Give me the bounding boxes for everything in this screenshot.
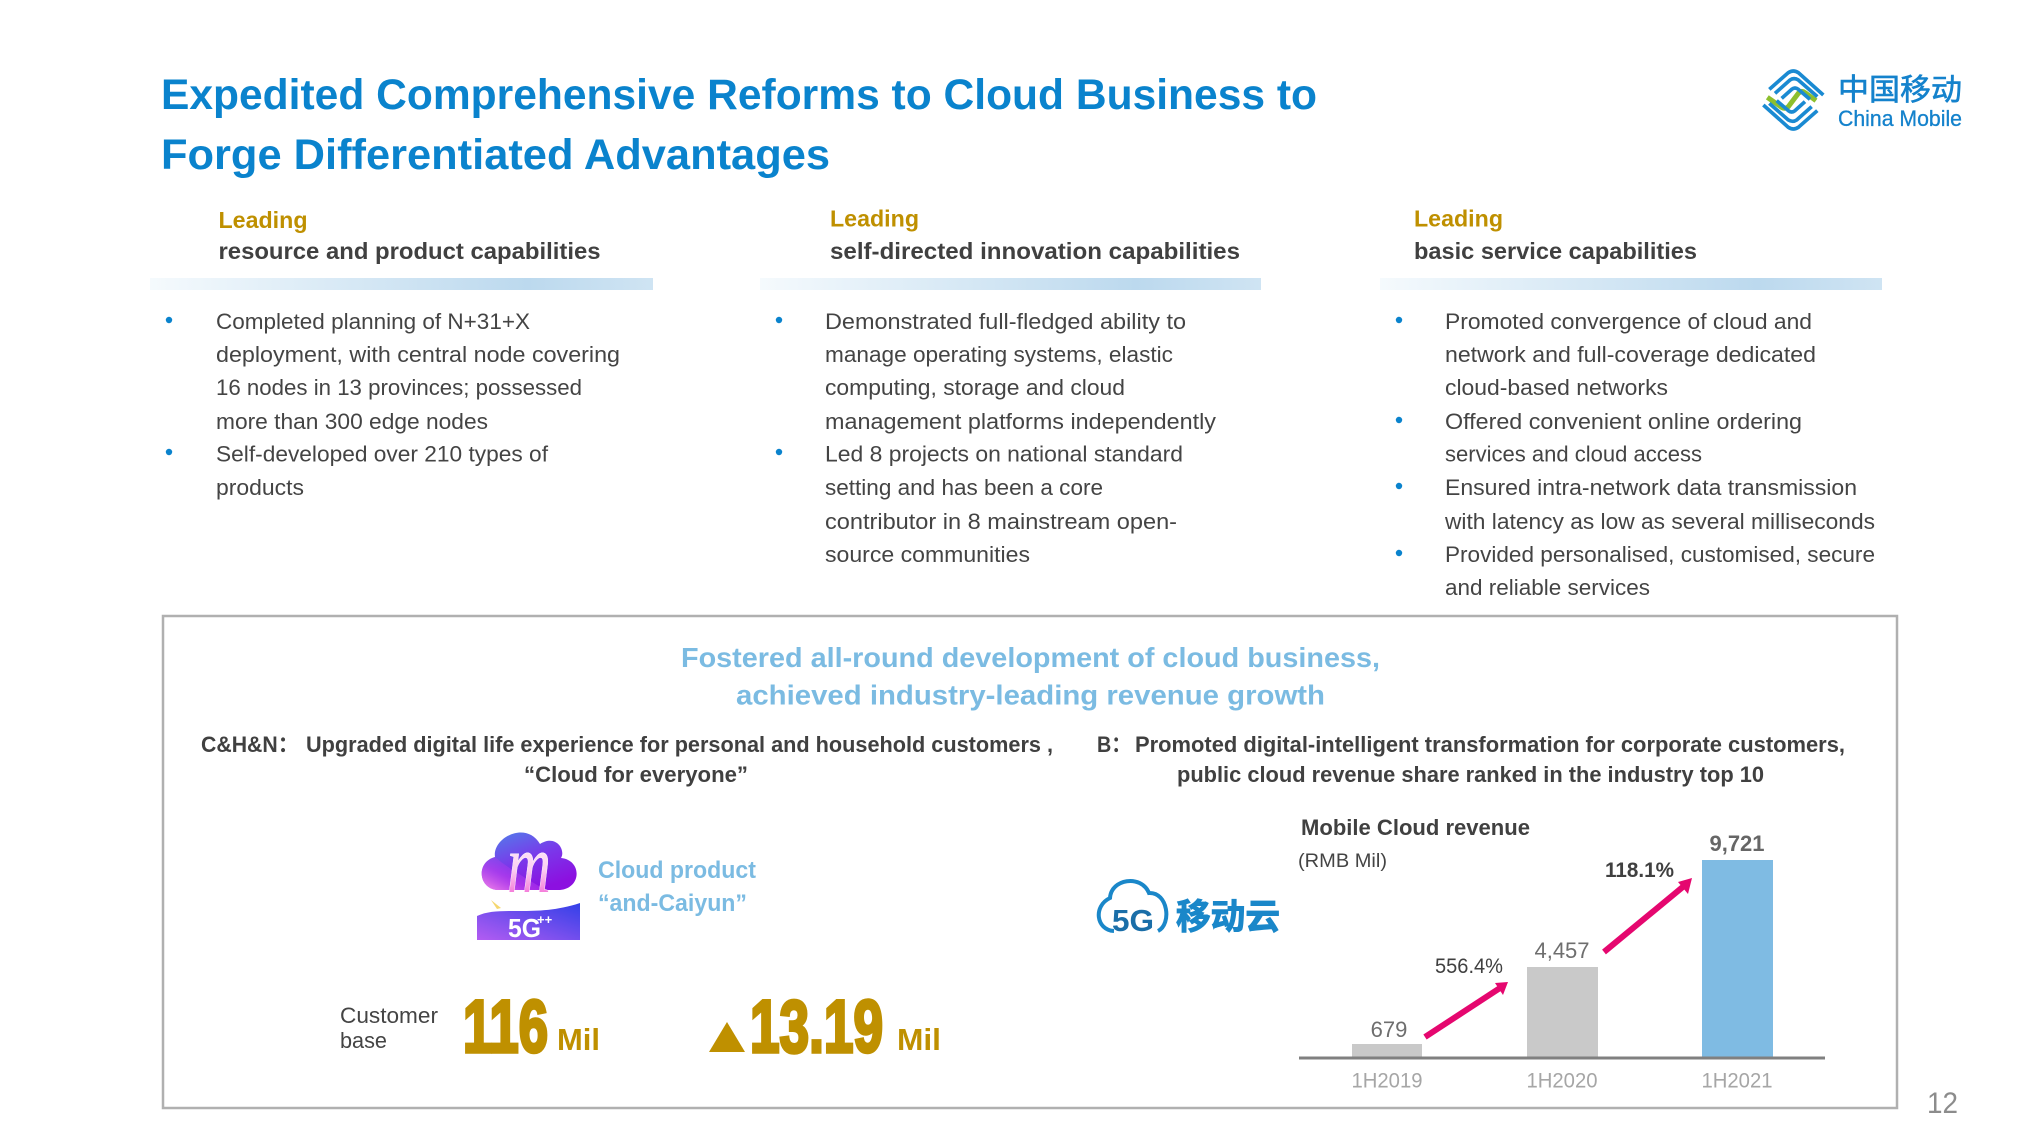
- subheading: C&H&N: C&H&N：: [201, 732, 299, 757]
- bar: 1H2020: 1H2020: [1526, 1070, 1598, 1092]
- label: customer base: Customer: [340, 1003, 438, 1028]
- bullet list: Demonstrated full-fledged ability to: [825, 309, 1186, 334]
- subheading: B: [1097, 732, 1845, 787]
- panel: cloud business frame: [163, 616, 1897, 1108]
- heading: resource and product capabilities: [218, 238, 600, 264]
- bullet list: setting and has been a core: [825, 475, 1103, 500]
- heading: Leading: [218, 207, 308, 233]
- bullet list: services and cloud access: [1445, 442, 1702, 466]
- label: cloud product and-Caiyun: Cloud product: [598, 857, 756, 884]
- bullet list: Led 8 projects on national standard: [825, 442, 1183, 466]
- bar: 1H2021: 1H2021: [1702, 1070, 1772, 1092]
- heading: self-directed innovation capabilities: [830, 238, 1240, 264]
- icon: and-Caiyun app: 5G: [508, 913, 541, 943]
- logo: China Mobile: 中国移动: [1838, 74, 1962, 107]
- label: cloud product and-Caiyun: [598, 857, 756, 917]
- bar: 1H2019: [1352, 1017, 1422, 1092]
- title: [161, 71, 1317, 179]
- subheading: C&H&N: “Cloud for everyone”: [524, 762, 748, 787]
- bullet list: deployment, with central node covering: [216, 342, 620, 367]
- frame heading: Fostered all-round development of cloud business,: [681, 642, 1380, 673]
- bullet list: Self-developed over 210 types of: [216, 442, 549, 466]
- icon: and-Caiyun app: [477, 818, 580, 943]
- chart title: Mobile Cloud revenue: [1301, 815, 1530, 840]
- heading: [1414, 206, 1697, 264]
- bullet list: Provided personalised, customised, secure: [1445, 542, 1875, 567]
- bullet list: source communities: [825, 542, 1030, 567]
- bar: 1H2020: 4,457: [1534, 938, 1590, 963]
- title: Expedited Comprehensive Reforms to Cloud Business to: [161, 71, 1317, 119]
- heading: basic service capabilities: [1414, 238, 1697, 264]
- icon: and-Caiyun app: ++: [537, 912, 553, 927]
- bullet list: network and full-coverage dedicated: [1445, 342, 1816, 367]
- heading: Leading: [830, 206, 919, 232]
- stat: increase 13.19 Mil: 13.19: [750, 985, 883, 1068]
- stat: increase 13.19 Mil: Mil: [897, 1022, 941, 1057]
- panel: resource and product capabilities: [150, 207, 653, 500]
- stat: 116 Mil: 116: [463, 985, 548, 1068]
- bullet list: manage operating systems, elastic: [825, 342, 1173, 367]
- bullet list: Ensured intra-network data transmission: [1445, 475, 1857, 500]
- logo: China Mobile: [1763, 71, 1962, 131]
- label: cloud product and-Caiyun: “and-Caiyun”: [598, 890, 747, 917]
- bullet list: products: [216, 475, 304, 500]
- label: customer base: [340, 1003, 438, 1053]
- bar: 1H2019: 1H2019: [1352, 1070, 1422, 1092]
- label: customer base: base: [340, 1028, 387, 1053]
- arrow: 118.1% growth: 118.1%: [1605, 859, 1674, 882]
- bullet list: [776, 309, 1216, 567]
- bullet list: Completed planning of N+31+X: [216, 309, 530, 334]
- arrow: 556.4% growth: 556.4%: [1435, 955, 1503, 978]
- panel: basic service capabilities: [1380, 206, 1882, 600]
- bar: 1H2020: [1526, 938, 1598, 1092]
- chart title: (RMB Mil): [1298, 850, 1387, 872]
- stat: 116 Mil: Mil: [557, 1022, 600, 1057]
- bullet list: Promoted convergence of cloud and: [1445, 309, 1812, 334]
- subheading: B: Promoted digital-intelligent transformation for corporate customers,: [1135, 732, 1845, 757]
- bar: 1H2021: [1702, 831, 1773, 1092]
- subheading: C&H&N: Upgraded digital life experience for personal and household customers ,: [306, 732, 1053, 757]
- heading: [830, 206, 1240, 264]
- bullet list: cloud-based networks: [1445, 375, 1668, 400]
- bar: 1H2019: 679: [1371, 1017, 1407, 1042]
- bar: 1H2021: 9,721: [1709, 831, 1765, 856]
- chart title: [1298, 815, 1530, 872]
- panel: self-directed innovation capabilities: [760, 206, 1261, 567]
- bullet list: 16 nodes in 13 provinces; possessed: [216, 375, 582, 400]
- icon: 5G Mobile Cloud logo: 5G: [1112, 903, 1154, 938]
- title: Forge Differentiated Advantages: [161, 131, 830, 179]
- arrow: 118.1% growth: [1604, 859, 1692, 952]
- logo: China Mobile: China Mobile: [1838, 106, 1962, 131]
- chart: Mobile Cloud revenue: [1298, 815, 1825, 1092]
- bullet list: with latency as low as several milliseconds: [1444, 509, 1875, 534]
- subheading: B: B：: [1097, 732, 1131, 757]
- page number: 12: [1927, 1087, 1958, 1120]
- bullet list: Offered convenient online ordering: [1445, 409, 1802, 434]
- bullet list: contributor in 8 mainstream open-: [825, 509, 1177, 534]
- bullet list: more than 300 edge nodes: [216, 409, 488, 434]
- subheading: C&H&N: [201, 732, 1053, 787]
- heading: Leading: [1414, 206, 1503, 232]
- frame heading: achieved industry-leading revenue growth: [736, 680, 1325, 710]
- bullet list: computing, storage and cloud: [825, 375, 1125, 400]
- bullet list: [1396, 309, 1875, 600]
- frame heading: [681, 642, 1380, 710]
- subheading: B: public cloud revenue share ranked in the industry top 10: [1177, 762, 1764, 787]
- bullet list: [166, 309, 620, 500]
- bullet list: management platforms independently: [825, 409, 1216, 434]
- icon: 5G Mobile Cloud logo: [1099, 881, 1280, 938]
- bullet list: and reliable services: [1445, 575, 1650, 600]
- arrow: 556.4% growth: [1425, 955, 1508, 1037]
- icon: and-Caiyun app: m: [507, 818, 551, 911]
- icon: 5G Mobile Cloud logo: 移动云: [1176, 898, 1280, 937]
- heading: [218, 207, 600, 264]
